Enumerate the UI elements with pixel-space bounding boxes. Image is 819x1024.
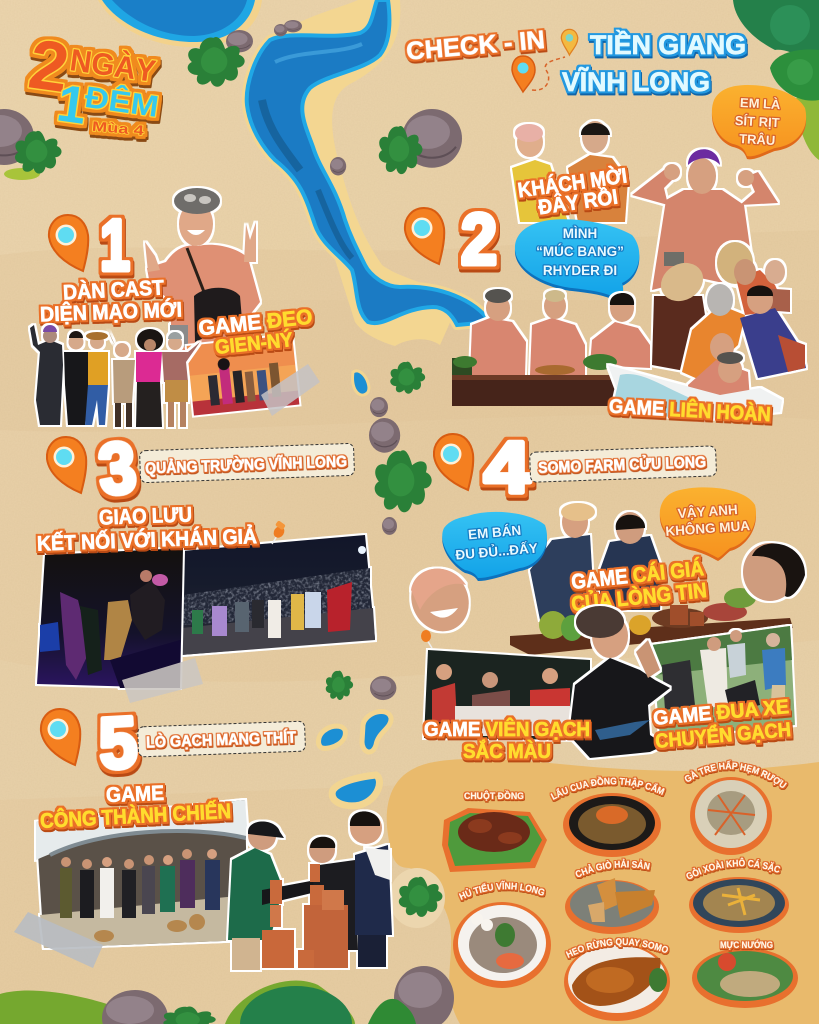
label: game cái giá của lòng tin: GAME CÁI GIÁ (570, 557, 705, 594)
label: game đeo gien-ny: GIEN-NÝ (214, 327, 294, 359)
heading: Tiền Giang: TIỀN GIANG (590, 29, 746, 60)
callout: em là sít rịt trâu: SÍT RỊT (734, 113, 780, 130)
figures: cái giá table (510, 503, 793, 655)
callout: em là sít rịt trâu: TRÂU (739, 131, 776, 148)
figure: head left (401, 559, 479, 641)
callout: vậy anh không mua: KHÔNG MUA (665, 518, 751, 539)
label: game công thành chiến (40, 782, 232, 833)
rocks and bushes (0, 20, 462, 928)
label: game công thành chiến: GAME (106, 782, 164, 807)
figures: liên hoan game group (608, 242, 806, 420)
river (247, 0, 490, 346)
section 2 number: 2 (461, 200, 497, 280)
food: hủ tiếu (453, 880, 551, 988)
logo: 2 Ngày 1 Đêm Mùa 4: ĐÊM (83, 80, 161, 124)
food panel (442, 759, 798, 1021)
label: game cái giá của lòng tin (570, 557, 708, 616)
callout: mình múc bang rhyder đi: MÌNH (563, 226, 597, 241)
label: game đua xe chuyển gạch: GAME ĐUA XE (652, 696, 790, 730)
food: heo rừng (564, 937, 670, 1021)
section 4 banner: SOMO FARM CỬU LONG (538, 452, 706, 477)
label: game viên gạch sắc màu: SẮC MÀU (463, 739, 551, 763)
section 1 title (40, 276, 182, 326)
food: chuột đồng: CHUỘT ĐỒNG (464, 790, 524, 802)
food: gà tre (684, 759, 788, 855)
food: gỏi xoài (685, 856, 789, 933)
section 1 title: DÀN CAST (62, 276, 165, 305)
label: khách mời đây rồi: ĐÂY RỒI (537, 185, 619, 219)
food: lẩu cua: LẨU CUA ĐỒNG THẬP CẨM (550, 776, 666, 802)
label: khách mời đây rồi: KHÁCH MỜI (516, 163, 629, 203)
logo: 2 Ngày 1 Đêm Mùa 4: NGÀY (68, 42, 158, 89)
figure: Rhyder (632, 149, 778, 372)
tape (14, 912, 103, 968)
tape (261, 364, 320, 416)
logo: 2 Ngày 1 Đêm Mùa 4: Mùa 4 (91, 118, 145, 138)
section 4 number: 4 (484, 428, 530, 508)
label: game đeo gien-ny (197, 306, 314, 359)
heading: Vĩnh Long: VĨNH LONG (562, 66, 710, 97)
tape (122, 658, 203, 703)
callout: mình múc bang rhyder đi: “MÚC BANG” (536, 244, 624, 259)
figures: cast group (30, 325, 200, 427)
section 4 pin (434, 434, 473, 490)
photo: đua xe (652, 626, 795, 738)
figure: head right (743, 543, 805, 601)
food: lẩu cua (550, 776, 666, 857)
heading: check-in: CHECK - IN (405, 26, 546, 66)
label: game đua xe chuyển gạch: CHUYỂN GẠCH (654, 718, 792, 753)
label: khách mời đây rồi (516, 163, 629, 219)
food: mực nướng (692, 939, 798, 1008)
section 5 banner (138, 721, 306, 757)
callout: em bán đu đủ: ĐU ĐỦ...ĐẤY (455, 540, 538, 563)
label: game công thành chiến: CÔNG THÀNH CHIẾN (40, 799, 232, 833)
photo: game đeo gien-ny (187, 335, 320, 416)
callout: em bán đu đủ (442, 512, 547, 578)
icon: pushpin (271, 520, 287, 544)
section 5 banner: LÒ GẠCH MANG THÍT (146, 727, 297, 752)
icon: orange pin with dashed route (512, 56, 565, 92)
figures: guests (512, 121, 628, 222)
trees top right (733, 0, 819, 160)
food: mực nướng: MỰC NƯỚNG (720, 939, 773, 951)
section 1 pin (49, 215, 88, 271)
food: gỏi xoài: GỎI XOÀI KHÔ CÁ SẶC (685, 856, 782, 882)
logo: 2 Ngày 1 Đêm Mùa 4: 2 (24, 24, 74, 107)
callout: vậy anh không mua (660, 487, 756, 558)
callout: em bán đu đủ: EM BÁN (467, 523, 522, 542)
callout: mình múc bang rhyder đi: RHYDER ĐI (543, 263, 617, 278)
food: chả giò (565, 858, 659, 934)
bottom decoration (0, 966, 454, 1024)
logo: 2 Ngày 1 Đêm Mùa 4: 1 (53, 74, 90, 136)
section 4 banner (530, 446, 717, 482)
section 3 banner (140, 443, 355, 483)
label: game cái giá của lòng tin: CỦA LÒNG TIN (570, 578, 708, 616)
callout: em là sít rịt trâu (712, 85, 806, 156)
section 3 pin (47, 437, 86, 493)
food: gà tre: GÀ TRE HẤP HẸM RƯỢU (684, 759, 788, 790)
logo: 2 Ngày 1 Đêm Mùa 4 (24, 24, 161, 138)
icon: yellow pin (561, 29, 578, 55)
figures and table: liên hoan (452, 289, 650, 406)
section 2 pin (405, 208, 444, 264)
photo: công thành chiến (36, 800, 248, 948)
figure: biker (569, 606, 670, 758)
food area sand blob (387, 759, 819, 1024)
section 1 title: DIỆN MẠO MỚI (40, 297, 182, 326)
callout: em là sít rịt trâu: EM LÀ (740, 95, 781, 112)
figures: stacking bricks (228, 811, 392, 970)
callout: mình múc bang rhyder đi (515, 219, 639, 298)
section 1 number: 1 (100, 206, 130, 286)
label: giao lưu kết nối với khán giả (37, 503, 257, 556)
food: chả giò: CHẢ GIÒ HẢI SẢN (574, 858, 652, 879)
label: game đeo gien-ny: GAME ĐEO (197, 306, 314, 340)
photo: giao lưu right (181, 535, 375, 655)
food: hủ tiếu: HỦ TIẾU VĨNH LONG (458, 880, 546, 902)
icon: pushpin section 4 (421, 630, 432, 648)
label: game liên hoàn: GAME LIÊN HOÀN (608, 394, 771, 426)
callout: vậy anh không mua: VẬY ANH (677, 502, 738, 521)
label: game viên gạch sắc màu: GAME VIÊN GẠCH (424, 717, 590, 741)
top lake (98, 0, 262, 47)
label: giao lưu kết nối với khán giả: GIAO LƯU (99, 503, 192, 530)
label: giao lưu kết nối với khán giả: KẾT NỐI VỚI KHÁN GIẢ (37, 524, 257, 556)
label: game đua xe chuyển gạch (652, 696, 792, 753)
section 5 pin (41, 709, 80, 765)
food: chuột đồng (442, 790, 547, 872)
photo: viên gạch (424, 650, 590, 740)
food: heo rừng: HEO RỪNG QUAY SOMO (564, 937, 670, 960)
section 5 number: 5 (97, 703, 139, 785)
section 3 number: 3 (95, 428, 139, 510)
photo: giao lưu left (37, 548, 183, 688)
pools (318, 371, 391, 806)
label: game viên gạch sắc màu (424, 717, 590, 763)
section 3 banner: QUẢNG TRƯỜNG VĨNH LONG (145, 451, 347, 478)
figure: Trấn Thành (145, 188, 260, 350)
